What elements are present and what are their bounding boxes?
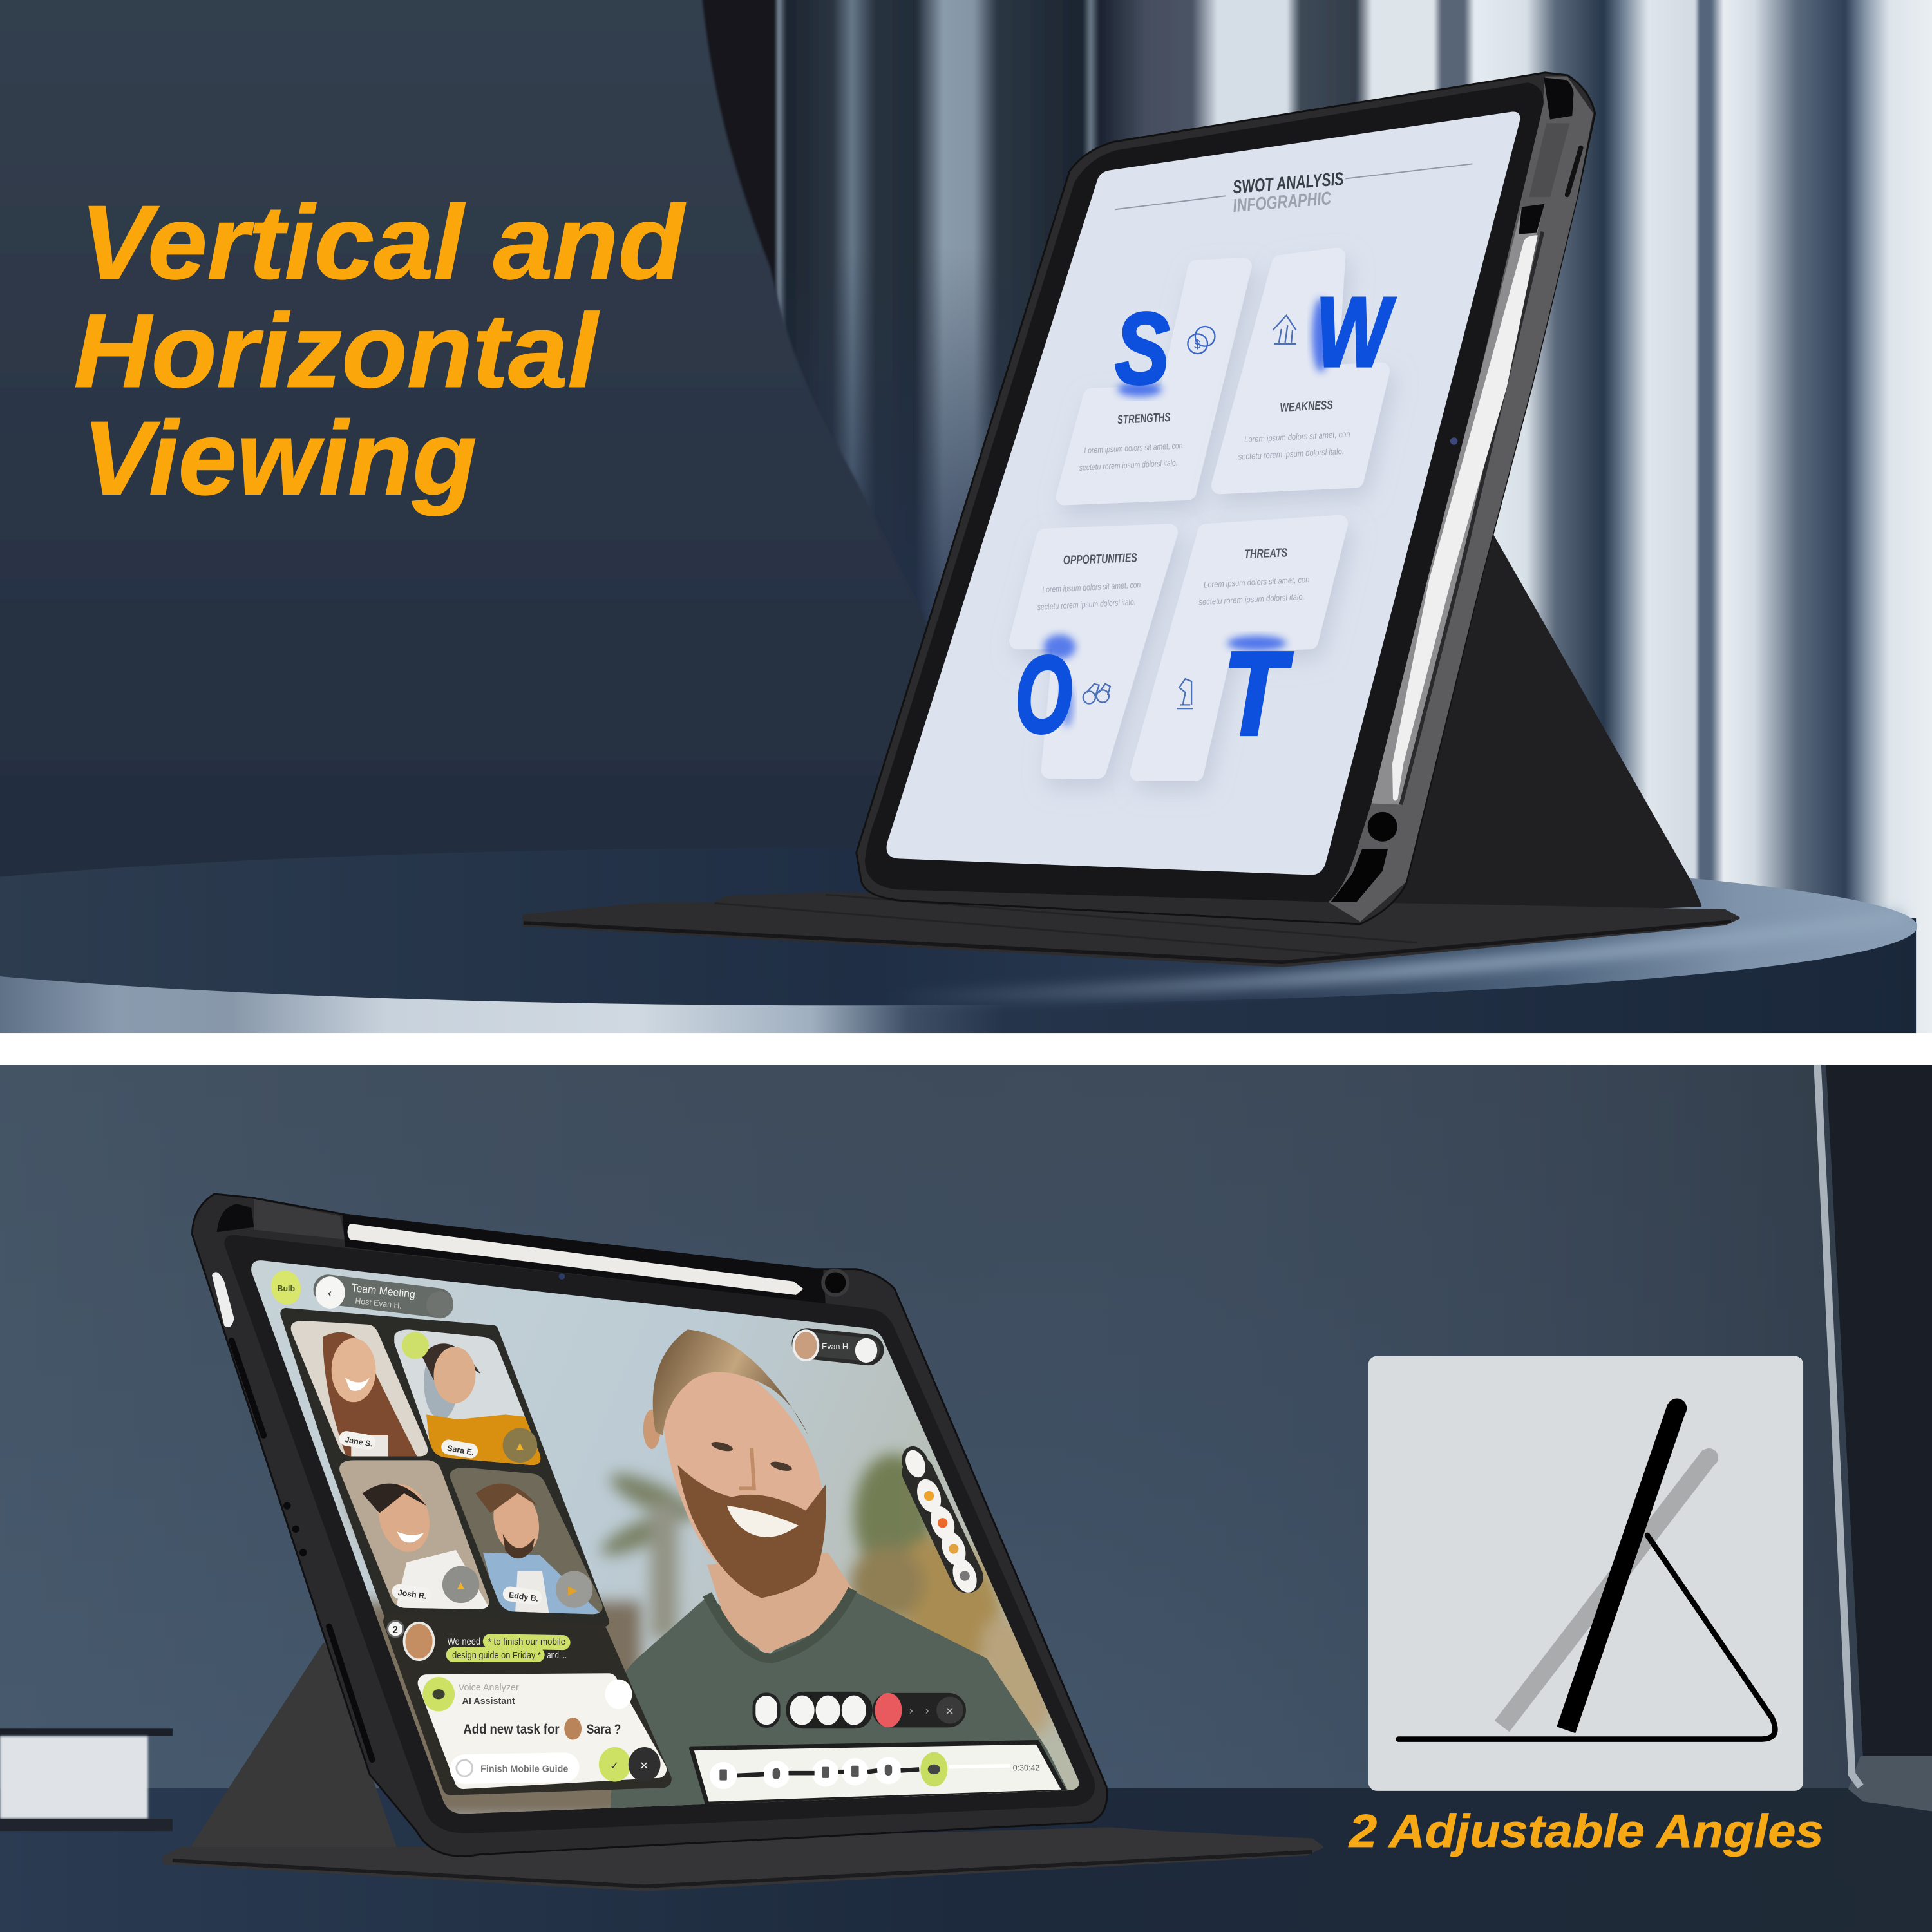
top corner slot <box>217 1204 254 1232</box>
chat panel: ✕ <box>639 1759 649 1772</box>
participant: Jane S. <box>283 1312 431 1460</box>
card: opportunities: sectetu rorem ipsum dolorsl italo. <box>1037 597 1136 612</box>
headline: Vertical and Horizontal Viewing: Horizontal <box>74 293 600 410</box>
stand triangle <box>1386 526 1700 918</box>
top bar: team meeting pill: Host Evan H. <box>355 1296 402 1311</box>
chat panel: design guide on Friday * <box>452 1651 541 1661</box>
collar <box>707 1589 853 1658</box>
card: weakness: WEAKNESS <box>1280 399 1333 415</box>
card: threats: sectetu rorem ipsum dolorsl italo. <box>1198 592 1305 607</box>
participant: Eddy B. <box>446 1464 609 1618</box>
main person <box>610 1329 1084 1824</box>
neck <box>707 1553 853 1654</box>
nose <box>739 1448 754 1488</box>
title: SWOT ANALYSIS INFOGRAPHIC <box>1115 164 1472 216</box>
blurred palm left <box>596 1465 701 1639</box>
chat avatar <box>404 1623 433 1660</box>
table front rim highlight <box>887 918 1897 998</box>
hair <box>653 1329 808 1435</box>
side slit top <box>232 1341 263 1435</box>
tablet screen <box>887 112 1520 875</box>
card: strengths <box>1065 266 1243 497</box>
grey lower angle position <box>1502 1448 1718 1726</box>
blurred palm right <box>850 1454 1066 1744</box>
chat panel: ✓ <box>610 1759 619 1772</box>
blue glow <box>1227 636 1286 650</box>
white divider band <box>0 1033 1932 1065</box>
card: strengths: $ <box>1194 338 1201 352</box>
participant: Jane S.: Jane S. <box>344 1435 374 1448</box>
stylus pencil <box>1392 235 1538 801</box>
case inner bezel <box>865 82 1544 902</box>
blue glow <box>1312 298 1329 372</box>
stand and base line <box>1399 1535 1775 1739</box>
laptop screen <box>1826 1065 1932 1757</box>
letter S: S <box>1115 292 1170 405</box>
table side <box>0 918 1916 1034</box>
desk surface <box>0 1788 1932 1932</box>
pencil channel <box>343 1215 826 1303</box>
chat panel: Sara ? <box>587 1722 621 1737</box>
top bar: team meeting pill <box>312 1273 455 1320</box>
call controls: › <box>909 1703 913 1716</box>
card: weakness: sectetu rorem ipsum dolorsl italo. <box>1238 446 1344 462</box>
pencil clip block <box>1529 123 1570 197</box>
AI assistant card <box>426 1682 658 1781</box>
top bar: team meeting pill: ‹ <box>328 1287 332 1301</box>
icon: house chart <box>1273 316 1296 344</box>
chat panel: Finish Mobile Guide <box>480 1764 568 1774</box>
inner bezel <box>224 1235 1095 1833</box>
panel: adjustable angle diagram <box>1368 1356 1803 1791</box>
beard <box>677 1465 826 1598</box>
participant: Josh R.: Josh R. <box>397 1588 427 1601</box>
chat panel: We need <box>448 1636 480 1647</box>
pencil slot top <box>1519 204 1544 234</box>
participant: Eddy B.: Eddy B. <box>508 1591 539 1604</box>
card: threats: Lorem ipsum dolors sit amet, con <box>1204 574 1310 590</box>
ear <box>643 1410 661 1449</box>
product: tablet in vertical orientation <box>524 73 1739 966</box>
chat panel: 2 <box>392 1625 398 1636</box>
corner clip block <box>254 1199 345 1240</box>
grey right rim <box>1328 77 1593 922</box>
case outer frame <box>857 73 1595 924</box>
chat highlighted text <box>483 1634 571 1650</box>
timeline bar <box>691 1742 1065 1804</box>
title: SWOT ANALYSIS INFOGRAPHIC: INFOGRAPHIC <box>1232 188 1332 216</box>
participants dark panel <box>286 1314 604 1622</box>
participant: Sara E.: Sara E. <box>446 1443 475 1457</box>
pencil channel <box>1371 205 1544 804</box>
call controls: ✕ <box>945 1705 954 1718</box>
call controls <box>754 1692 966 1728</box>
blurred building and metal area <box>345 1602 641 1817</box>
timeline bar: 0:30:42 <box>1013 1763 1039 1772</box>
background: vertical curtain stripes <box>0 0 1932 1047</box>
video call screen <box>247 1257 1084 1824</box>
blue glow <box>1117 382 1162 397</box>
card: strengths: STRENGTHS <box>1117 411 1171 427</box>
t-shirt <box>611 1593 1068 1808</box>
chat panel: Add new task for <box>463 1722 560 1737</box>
chat panel: * to finish our mobile <box>488 1637 565 1647</box>
top bar: assistant badge <box>267 1267 305 1308</box>
chat panel <box>388 1621 663 1786</box>
chat panel: Voice Analyzer <box>459 1683 519 1693</box>
icon: binoculars <box>1083 684 1110 703</box>
case outer frame <box>192 1194 1107 1856</box>
book on desk <box>0 1728 173 1831</box>
call controls: › <box>925 1703 929 1716</box>
stand triangle <box>193 1645 394 1846</box>
smile <box>727 1506 799 1537</box>
letter W: W <box>1316 277 1396 387</box>
card: opportunities: Lorem ipsum dolors sit amet, con <box>1042 580 1141 594</box>
table top <box>0 848 1917 1005</box>
top bar: team meeting pill: Team Meeting <box>351 1281 416 1300</box>
letter T: T <box>1224 627 1293 759</box>
card: weakness: Lorem ipsum dolors sit amet, con <box>1244 429 1350 444</box>
lower slot <box>1331 849 1388 902</box>
laptop base <box>1848 1756 1932 1811</box>
card: strengths: sectetu rorem ipsum dolorsl italo. <box>1079 458 1178 473</box>
participant: Josh R.: ▲ <box>455 1579 467 1593</box>
chat panel: AI Assistant <box>462 1696 515 1707</box>
camera dot <box>1450 437 1457 445</box>
top right host pill <box>792 1329 884 1365</box>
participant: Sara E.: ▲ <box>514 1440 526 1454</box>
product: tablet in horizontal orientation <box>164 1194 1322 1890</box>
speaker dots <box>283 1502 307 1556</box>
icon: chess knight <box>1177 679 1193 708</box>
card: opportunities <box>1016 533 1170 770</box>
headline: Vertical and Horizontal Viewing: Viewing <box>82 400 477 516</box>
background: lower stripe fade <box>739 247 1232 887</box>
side pencil tip <box>212 1272 234 1327</box>
participant: Eddy B.: ▶ <box>568 1584 578 1598</box>
pencil groove line <box>1401 232 1542 804</box>
card: weakness <box>1220 256 1396 486</box>
icon: coins <box>1188 327 1215 354</box>
folded base sheet <box>524 893 1739 966</box>
caption: 2 Adjustable Angles: 2 Adjustable Angles <box>1348 1805 1824 1857</box>
stylus pencil <box>348 1224 803 1295</box>
card: threats: THREATS <box>1244 546 1288 562</box>
participant: Josh R. <box>335 1454 495 1614</box>
headline: Vertical and Horizontal Viewing: Vertical and <box>80 184 687 301</box>
title: SWOT ANALYSIS INFOGRAPHIC: SWOT ANALYSIS <box>1232 169 1344 198</box>
chat panel: and ... <box>547 1651 567 1661</box>
card: opportunities: OPPORTUNITIES <box>1063 551 1137 567</box>
charging hole <box>1368 812 1397 842</box>
panel: top photo scene <box>0 0 1932 1047</box>
camera dots <box>559 1273 565 1280</box>
blue glow <box>1044 634 1075 659</box>
background: dark curved wall <box>0 0 1023 912</box>
panel: bottom photo scene <box>0 1065 1932 1932</box>
letter O: O <box>1016 634 1072 755</box>
screen background sky <box>247 1257 1084 1817</box>
side slit bottom <box>329 1627 372 1759</box>
right reactions column <box>900 1445 981 1596</box>
headline: Vertical and Horizontal Viewing <box>74 184 687 516</box>
top bar: assistant badge: Bulb <box>277 1284 295 1293</box>
laptop silver edge <box>1817 1065 1861 1786</box>
card: threats <box>1139 524 1340 773</box>
black upper angle position <box>1566 1399 1687 1730</box>
folded base sheet <box>164 1828 1322 1890</box>
top right host pill: Evan H. <box>822 1342 850 1351</box>
top corner slot <box>1544 78 1574 120</box>
card: strengths: Lorem ipsum dolors sit amet, con <box>1084 440 1183 455</box>
charging hole <box>823 1271 848 1295</box>
wall <box>0 1065 1932 1788</box>
participant: Sara E. <box>394 1325 548 1472</box>
face <box>663 1372 822 1564</box>
side buttons <box>1567 148 1581 194</box>
eyes <box>710 1440 793 1473</box>
